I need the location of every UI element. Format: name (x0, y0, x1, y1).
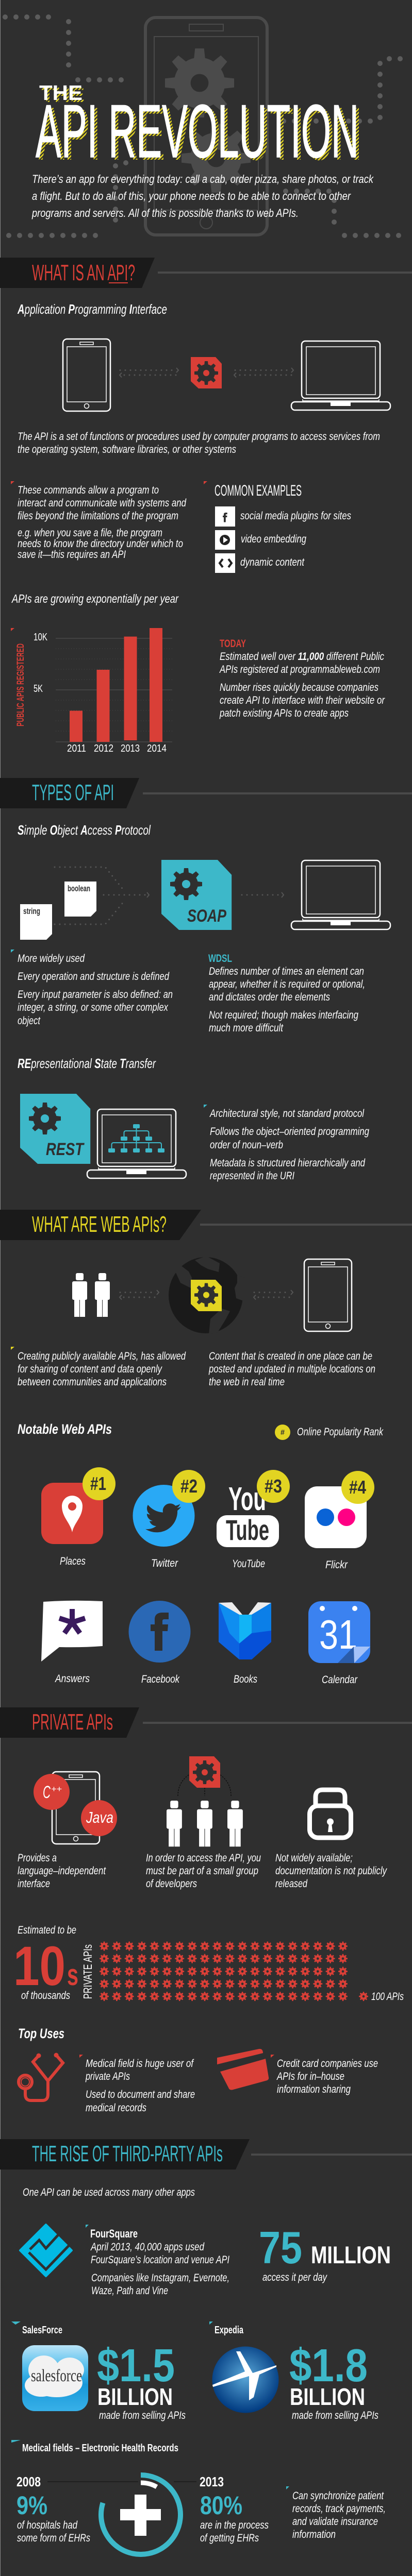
panel: SalesForce: made from selling APIs (99, 2410, 186, 2421)
icon: Flickr: Flickr (325, 1559, 348, 1571)
panel: SalesForce (11, 2321, 186, 2421)
icon: Twitter: Twitter (151, 1557, 178, 1569)
title: THE (39, 81, 83, 105)
text block: commands: needs to know the directory under which to (18, 538, 183, 550)
icon: Flickr: #4 (349, 1477, 366, 1498)
stat: 75 million: MILLION (311, 2241, 391, 2268)
bar chart: public APIs registered: 2011 (67, 743, 86, 754)
bar chart: public APIs registered: 5K (34, 683, 43, 694)
section heading: What are web APIs? (0, 1210, 412, 1240)
diagram: SOAP: SOAP (187, 906, 226, 926)
big stat: tens of thousands (13, 1924, 94, 2002)
panel: SalesForce: salesforce (31, 2366, 82, 2385)
subheading: SOAP: Simple Object Access Protocol (18, 822, 151, 838)
chart heading: APIs are growing exponentially per year (11, 592, 179, 605)
text block: REST facts: Architectural style, not standard protocol (209, 1108, 365, 1120)
icon: YouTube: YouTube (232, 1558, 265, 1570)
section heading: What is an API? (0, 258, 412, 288)
stat: 2013 (174, 2474, 269, 2544)
icon: Twitter: #2 (180, 1476, 197, 1497)
text block: REST facts: Follows the object–oriented programming (210, 1126, 369, 1138)
icon: Places (41, 1467, 116, 1567)
pictogram: private API gears (100, 1941, 404, 2003)
heading: medical fields (11, 2440, 178, 2454)
subheading: Top Uses: Top Uses (18, 2026, 64, 2041)
bar chart: public APIs registered: 2012 (94, 743, 113, 754)
icon: Places: Places (60, 1555, 86, 1567)
text block: medical use: Medical field is huge user of (86, 2058, 194, 2070)
diagram: SOAP: string (23, 906, 40, 916)
icon: YouTube: You (228, 1480, 266, 1517)
icon: Calendar: 31 (319, 1612, 357, 1657)
stat: 2008: some form of EHRs (17, 2532, 90, 2544)
subheading: Notable Web APIs: Notable Web APIs (18, 1421, 112, 1437)
intro text: a flight. But to do all of this, your phone needs to be able to connect to other (32, 190, 351, 202)
panel: Expedia: $1.8 (289, 2340, 368, 2392)
text block: commands: interact and communicate with systems and (18, 497, 187, 509)
bar chart: public APIs registered: 10K (34, 632, 47, 643)
icon: Books: Books (234, 1673, 257, 1685)
text block: SOAP facts: Every input parameter is also defined: an (18, 989, 173, 1001)
text block: FourSquare: FourSquare’s location and venue API (91, 2254, 229, 2266)
text block: commands: save it—this requires an API (18, 549, 126, 561)
panel: SalesForce: BILLION (97, 2383, 173, 2410)
text block: private APIs facts: Not widely available; (275, 1852, 353, 1864)
text block: REST facts: order of noun–verb (210, 1139, 283, 1151)
text block: private APIs facts: Provides a (18, 1852, 57, 1864)
text block: medical use: private APIs (85, 2071, 130, 2082)
text block: SOAP facts: More widely used (18, 953, 85, 964)
text block: FourSquare (86, 2225, 229, 2297)
text block: WDSL (208, 953, 365, 1034)
text block: SOAP facts: integer, a string, or some other complex (18, 1002, 169, 1013)
icon: Places: #1 (90, 1473, 106, 1494)
bar chart: public APIs registered: PUBLIC APIS REGISTERED (15, 643, 26, 726)
text block: FourSquare: Waze, Path and Vine (91, 2285, 168, 2297)
text block: public APIs: Creating publicly available APIs, has allowed (18, 1350, 186, 1362)
API definition: the operating system, software libraries, or other systems (18, 444, 236, 455)
intro text: programs and servers. All of this is possible thanks to web APIs. (31, 207, 299, 219)
stat: 2013: 80% (200, 2491, 242, 2520)
bar chart: public APIs registered: 2013 (121, 743, 140, 754)
section heading: Private APIs (0, 1707, 412, 1738)
stat: 2008: of hospitals had (17, 2519, 78, 2531)
text block: commands (11, 481, 187, 561)
text block: today (219, 638, 385, 719)
text block: WDSL: WDSL (208, 953, 232, 964)
text block: private APIs facts: released (275, 1878, 308, 1890)
stat: 2008: 2008 (17, 2474, 41, 2489)
icon: phone with languages: Java (86, 1808, 113, 1826)
icon: Answers (41, 1601, 103, 1685)
text block: commands: These commands allow a program to (18, 484, 159, 496)
text block: medical use: Used to document and share (86, 2089, 195, 2100)
legend: popularity rank: # (281, 1428, 285, 1437)
icon: credit card (217, 2049, 269, 2090)
subheading: Application Programming Interface: Application Programming Interface (17, 301, 167, 317)
text block: content: the web in real time (209, 1376, 285, 1388)
legend: popularity rank (275, 1425, 384, 1440)
text block: EHR benefits (286, 2486, 386, 2540)
big stat: tens of thousands: of thousands (21, 1990, 70, 2002)
text block: FourSquare: Companies like Instagram, Evernote, (91, 2272, 229, 2284)
text block: private APIs facts: interface (18, 1878, 50, 1890)
panel: SalesForce: $1.5 (97, 2340, 175, 2392)
text block: EHR benefits: information (292, 2529, 336, 2540)
text block: commands: files beyond the limitations of the program (18, 510, 178, 522)
section heading: Types of API: TYPES OF API (32, 780, 114, 805)
panel: common examples: social media plugins for sites (240, 510, 351, 522)
text block: public APIs: between communities and applications (18, 1376, 167, 1388)
icon: Facebook: Facebook (141, 1673, 180, 1685)
icon: phone with languages: C (43, 1783, 51, 1802)
text block: medical use: medical records (86, 2102, 146, 2114)
text block: credit card use: Credit card companies use (277, 2058, 378, 2070)
stat: 75 million: 75 (259, 2222, 302, 2273)
text block: REST facts (204, 1105, 369, 1182)
icon: Flickr (305, 1471, 374, 1571)
big stat: tens of thousands: s (67, 1958, 78, 1992)
text block: private APIs facts: documentation is not publicly (275, 1865, 387, 1877)
stat: 2008 (17, 2474, 138, 2544)
icon: YouTube: Tube (226, 1514, 269, 1546)
icon: padlock (309, 1790, 351, 1838)
text block: FourSquare: April 2013, 40,000 apps used (90, 2241, 205, 2253)
icon: Facebook (129, 1601, 191, 1685)
text block: private APIs facts: must be part of a small group (146, 1865, 258, 1877)
text block: medical use (79, 2055, 195, 2114)
intro: one API: One API can be used across many other apps (23, 2187, 195, 2198)
text block: private APIs facts: In order to access the API, you (146, 1852, 261, 1864)
hero background: dotted circuit lines (5, 17, 411, 235)
big stat: tens of thousands: PRIVATE APIs (81, 1944, 94, 1999)
panel: common examples: COMMON EXAMPLES (215, 482, 302, 499)
text block: today: patch existing APIs to create apps (219, 707, 349, 719)
text block: commands: e.g. when you save a file, the program (18, 527, 162, 539)
section heading: Private APIs: PRIVATE APIs (32, 1709, 113, 1735)
section heading: Types of API (0, 778, 412, 808)
text block: SOAP facts: object (18, 1015, 41, 1027)
text block: credit card use: information sharing (277, 2083, 351, 2095)
icon: medical cross ring (101, 2475, 180, 2554)
text block: EHR benefits: records, track payments, (292, 2503, 386, 2515)
icon: YouTube (217, 1470, 290, 1570)
heading: medical fields: Medical fields – Electronic Health Records (22, 2443, 178, 2454)
diagram: phone, API, laptop (63, 339, 390, 411)
text block: EHR benefits: Can synchronize patient (292, 2490, 384, 2502)
subheading: REST: REpresentational State Transfer (18, 1056, 156, 1071)
panel: common examples (204, 481, 351, 573)
text block: public APIs: for sharing of content and data openly (18, 1363, 162, 1375)
panel: common examples: video embedding (241, 533, 306, 545)
icon: Calendar (308, 1601, 370, 1686)
panel: Expedia: BILLION (290, 2383, 365, 2410)
icon: stethoscope (19, 2053, 63, 2100)
API definition (18, 431, 380, 455)
text block: REST facts: Metadata is structured hierarchically and (210, 1157, 366, 1169)
icon: phone with languages: ++ (51, 1784, 62, 1794)
icon: phone with languages (34, 1772, 117, 1844)
text block: public APIs (11, 1347, 186, 1388)
icon: Answers: Answers (54, 1673, 90, 1685)
text block: private APIs facts: language–independent (18, 1865, 106, 1877)
text block: WDSL: much more difficult (209, 1022, 284, 1034)
text block: EHR benefits: and validate insurance (292, 2516, 378, 2528)
diagram: REST: REST (46, 1140, 85, 1159)
hero background: phone with gears (145, 18, 267, 235)
panel: SalesForce: SalesForce (22, 2325, 62, 2336)
section heading: What are web APIs?: WHAT ARE WEB APIs? (32, 1212, 167, 1237)
text block: today: TODAY (220, 638, 246, 650)
text block: private APIs facts (18, 1852, 387, 1890)
bar chart: public APIs registered: 2014 (147, 743, 167, 754)
diagram: SOAP: boolean (68, 884, 90, 893)
text block: content: Content that is created in one place can be (209, 1350, 372, 1362)
text block: WDSL: and dictates order the elements (209, 991, 330, 1003)
intro text (31, 173, 374, 219)
text block: WDSL: appear, whether it is required or optional, (209, 978, 365, 990)
stat: 75 million (259, 2222, 391, 2283)
stat: 2008: 9% (17, 2491, 47, 2520)
stat: 2013: 2013 (200, 2474, 224, 2489)
text block: SOAP facts: Every operation and structure is defined (18, 971, 170, 982)
icon: FourSquare (20, 2225, 72, 2276)
text block: private APIs facts: of developers (146, 1878, 197, 1890)
text block: credit card use (271, 2055, 378, 2095)
icon: API with developers (167, 1756, 243, 1846)
stat: 2013: of getting EHRs (200, 2532, 259, 2544)
text block: WDSL: Not required; though makes interfacing (209, 1009, 358, 1021)
text block: FourSquare: FourSquare (90, 2227, 138, 2240)
section heading: The rise of third-party APIs: THE RISE OF THIRD-PARTY APIs (32, 2141, 223, 2166)
panel: Expedia (209, 2321, 378, 2421)
diagram: REST (20, 1094, 186, 1178)
big stat: tens of thousands: 10 (13, 1935, 65, 1997)
icon: Books (219, 1602, 271, 1685)
panel: Expedia: made from selling APIs (292, 2410, 378, 2421)
title: THE (41, 83, 85, 107)
text block: REST facts: represented in the URI (210, 1170, 294, 1182)
bar chart: public APIs registered (11, 628, 172, 754)
section heading: What is an API?: WHAT IS AN API? (32, 260, 135, 285)
diagram: people, globe, phone (72, 1256, 352, 1334)
icon: Calendar: Calendar (322, 1674, 358, 1686)
text block: today: Estimated well over 11,000 different Public (220, 651, 384, 663)
diagram: SOAP (20, 860, 390, 940)
stat: 75 million: access it per day (262, 2272, 327, 2283)
legend: popularity rank: Online Popularity Rank (297, 1426, 384, 1438)
text block: content (208, 1350, 375, 1388)
text block: SOAP facts (11, 950, 173, 1027)
panel: Expedia: Expedia (215, 2325, 244, 2336)
icon: YouTube: #3 (265, 1476, 282, 1497)
icon: Twitter (133, 1470, 205, 1569)
text block: content: posted and updated in multiple locations on (208, 1363, 375, 1375)
stat: 2013: are in the process (200, 2519, 269, 2531)
text block: credit card use: APIs for in–house (276, 2071, 344, 2082)
big stat: tens of thousands: Estimated to be (18, 1924, 76, 1936)
text block: WDSL: Defines number of times an element can (209, 965, 364, 977)
panel: common examples: dynamic content (240, 556, 305, 568)
